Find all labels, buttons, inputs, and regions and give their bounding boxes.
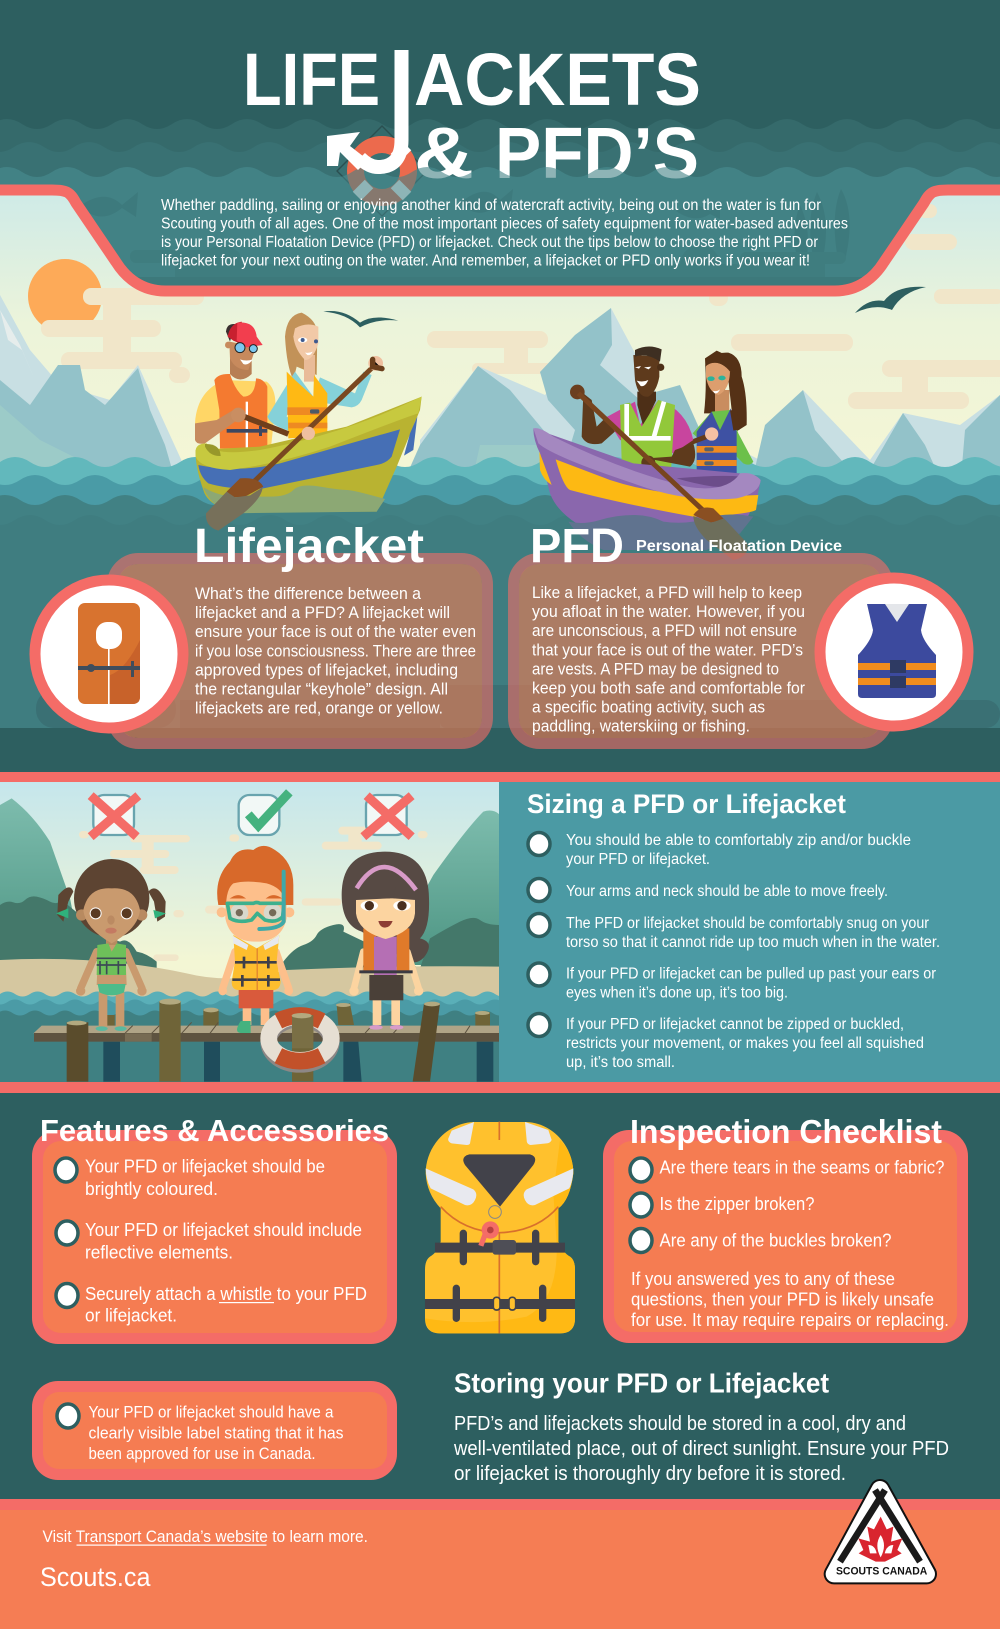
intro text: lifejacket for your next outing on the water. And remember, a lifejacket or PFD only works if you wear it! <box>161 252 810 270</box>
panel: PFD <box>514 520 968 744</box>
title text: PFD’S <box>495 114 699 194</box>
sizing text: You should be able to comfortably zip and/or buckle <box>566 832 911 849</box>
features text: Securely attach a whistle to your PFD <box>85 1284 367 1304</box>
salmon banner outline <box>0 190 1000 291</box>
footer <box>0 1499 1000 1629</box>
intro text <box>161 197 848 270</box>
inspection text: If you answered yes to any of these <box>631 1269 895 1289</box>
title: J hook and arrow <box>327 50 402 170</box>
features bullets <box>55 1158 78 1308</box>
intro text: Whether paddling, sailing or enjoying another kind of watercraft activity, being out on the water is fun for <box>161 197 821 214</box>
intro text: Scouting youth of all ages. One of the most important pieces of safety equipment for water-based adventures <box>161 216 848 232</box>
title text <box>247 52 698 178</box>
kid 1: girl in green vest, wrong fit <box>56 859 166 1031</box>
check box: wrong fit right <box>363 795 412 837</box>
heading: features: Features & Accessories <box>40 1113 389 1148</box>
scene: three kids on a dock <box>0 782 499 1082</box>
kid 3: girl in orange vest, wrong fit <box>342 852 429 1030</box>
panel: sizing <box>499 782 1000 1082</box>
paddle <box>578 393 713 520</box>
sizing text: eyes when it’s done up, it’s too big. <box>566 984 788 1002</box>
inspection text: Are any of the buckles broken? <box>660 1230 892 1250</box>
inspection text <box>631 1158 949 1330</box>
label text: clearly visible label stating that it has <box>88 1424 344 1442</box>
inner paddle of man <box>242 416 288 434</box>
PFD description: that your face is out of the water. PFD’s <box>532 641 803 659</box>
storing text: PFD’s and lifejackets should be stored in a cool, dry and <box>454 1413 906 1435</box>
forest <box>0 896 157 972</box>
inspection text: questions, then your PFD is likely unsafe <box>631 1290 934 1310</box>
PFD description: a specific boating activity, such as <box>532 699 765 717</box>
heading: sizing: Sizing a PFD or Lifejacket <box>527 789 846 819</box>
heading: PFD <box>530 520 842 573</box>
PFD description: you afloat in the water. However, if you <box>532 603 805 621</box>
storing text <box>453 1413 949 1485</box>
lifejacket description: the rectangular “keyhole” design. All <box>195 680 448 698</box>
lower scene silhouette <box>36 685 1000 728</box>
intro text: is your Personal Floatation Device (PFD) or lifejacket. Check out the tips below to choose the right PFD or <box>161 234 818 251</box>
water layers <box>0 457 1000 1420</box>
sun <box>28 259 102 333</box>
PFD description: are unconscious, a PFD will not ensure <box>532 622 797 640</box>
storing text: or lifejacket is thoroughly dry before it is stored. <box>454 1463 846 1485</box>
divider band middle <box>0 1082 1000 1093</box>
underwater hull <box>203 486 385 513</box>
PFD description: paddling, waterskiing or fishing. <box>532 718 750 736</box>
heading: storing: Storing your PFD or Lifejacket <box>454 1368 829 1398</box>
clouds <box>41 204 1000 409</box>
fish silhouettes <box>80 189 720 219</box>
PFD description: are vests. A PFD may be designed to <box>532 660 779 678</box>
PFD description: Like a lifejacket, a PFD will help to keep <box>532 584 802 602</box>
maple leaf <box>858 1517 902 1562</box>
heading: inspection: Inspection Checklist <box>630 1113 942 1150</box>
panel: lifejacket <box>35 520 488 744</box>
scene water <box>0 992 499 1082</box>
man in orange lifejacket <box>195 322 275 457</box>
sizing text: If your PFD or lifejacket can be pulled up past your ears or <box>566 966 936 982</box>
sizing text: torso so that it cannot ride up too much when in the water. <box>566 934 940 951</box>
beach <box>0 958 499 996</box>
heading: PFD: Personal Floatation Device <box>636 538 842 555</box>
label text: been approved for use in Canada. <box>88 1445 316 1463</box>
paddle <box>238 365 375 497</box>
logo wordmark: SCOUTS CANADA <box>836 1566 927 1578</box>
lifejacket description: lifejacket and a PFD? A lifejacket will <box>195 604 450 622</box>
heading: lifejacket: Lifejacket <box>194 520 424 573</box>
boat hull <box>533 428 761 537</box>
features text: brightly coloured. <box>85 1179 218 1199</box>
check box: right fit <box>239 792 289 835</box>
front posts <box>67 999 440 1082</box>
inspection text: for use. It may require repairs or replacing. <box>631 1310 949 1330</box>
header waves and content clipped to the curved banner <box>0 50 1000 286</box>
sizing text: your PFD or lifejacket. <box>566 851 710 868</box>
icon: keyhole lifejacket <box>35 580 183 728</box>
sizing text: The PFD or lifejacket should be comfortably snug on your <box>566 915 929 932</box>
features text: Your PFD or lifejacket should be <box>85 1156 325 1176</box>
back posts and legs <box>103 1003 493 1082</box>
woman in yellow lifejacket <box>267 313 372 438</box>
sizing text: up, it’s too small. <box>566 1054 675 1071</box>
PFD description: keep you both safe and comfortable for <box>532 680 805 698</box>
header shape with intro <box>0 50 1000 296</box>
kid 2: boy in yellow vest, right fit <box>217 846 294 1033</box>
PFD description <box>532 584 805 736</box>
boat hull <box>196 397 422 512</box>
life ring <box>269 1013 331 1064</box>
lifejacket description: lifejackets are red, orange or yellow. <box>195 700 443 718</box>
sizing text: Your arms and neck should be able to move freely. <box>566 883 888 900</box>
lifejacket description: if you lose consciousness. There are three <box>195 642 476 660</box>
boat 2 with two paddlers <box>533 346 761 560</box>
features text: or lifejacket. <box>85 1306 177 1326</box>
inspection text: Is the zipper broken? <box>660 1194 814 1214</box>
inspection text: Are there tears in the seams or fabric? <box>660 1158 944 1178</box>
lifejacket description <box>195 585 476 718</box>
label text: Your PFD or lifejacket should have a <box>88 1404 334 1422</box>
dark base band and lower section background <box>0 728 1000 1508</box>
panel: approval label <box>32 1381 397 1480</box>
label bullet <box>57 1404 79 1428</box>
lifejacket description: What’s the difference between a <box>195 585 422 603</box>
storing text: well-ventilated place, out of direct sunlight. Ensure your PFD <box>453 1438 949 1460</box>
features text: Your PFD or lifejacket should include <box>85 1220 362 1240</box>
dock <box>33 1022 500 1042</box>
logo: Scouts Canada <box>834 1489 927 1578</box>
features text: reflective elements. <box>85 1242 233 1262</box>
title text: ACKETS <box>414 38 701 121</box>
whistle <box>478 1221 499 1247</box>
icon: blue PFD vest <box>820 578 968 726</box>
underwater hull <box>568 515 753 550</box>
sky and landscape background <box>0 185 1000 495</box>
sizing text <box>566 832 940 1071</box>
tree silhouettes <box>794 189 850 262</box>
title text: LIFE <box>243 38 380 121</box>
man in green PFD <box>570 346 695 477</box>
features text <box>85 1156 367 1326</box>
hills <box>0 798 72 908</box>
title text: & <box>414 114 474 194</box>
heading: PFD: PFD <box>530 520 624 573</box>
panel: inspection checklist <box>603 1113 968 1343</box>
footer link line: Visit Transport Canada’s website to learn more. <box>42 1528 368 1546</box>
footer website: Scouts.ca <box>40 1562 151 1592</box>
lifejacket description: approved types of lifejacket, including <box>195 661 458 679</box>
bird <box>323 311 398 327</box>
inspection bullets <box>630 1158 652 1252</box>
sizing text: If your PFD or lifejacket cannot be zipped or buckled, <box>566 1016 904 1033</box>
icon: yellow lifejacket with whistle <box>425 1122 575 1333</box>
sizing bullets <box>528 832 550 1036</box>
boat 1 with two paddlers <box>195 311 422 531</box>
bird right <box>855 287 926 313</box>
check box: wrong fit left <box>91 795 138 837</box>
mountains <box>0 295 1000 490</box>
title: lifebuoy <box>337 126 427 216</box>
water overlay <box>84 167 862 286</box>
storing section <box>453 1368 949 1485</box>
lifejacket description: ensure your face is out of the water even <box>195 623 476 641</box>
divider band top <box>0 772 1000 782</box>
sizing text: restricts your movement, or makes you feel all squished <box>566 1035 924 1052</box>
clouds <box>79 827 428 961</box>
woman in blue PFD <box>673 351 753 489</box>
label text <box>88 1404 344 1463</box>
panel: features and accessories <box>32 1113 397 1344</box>
